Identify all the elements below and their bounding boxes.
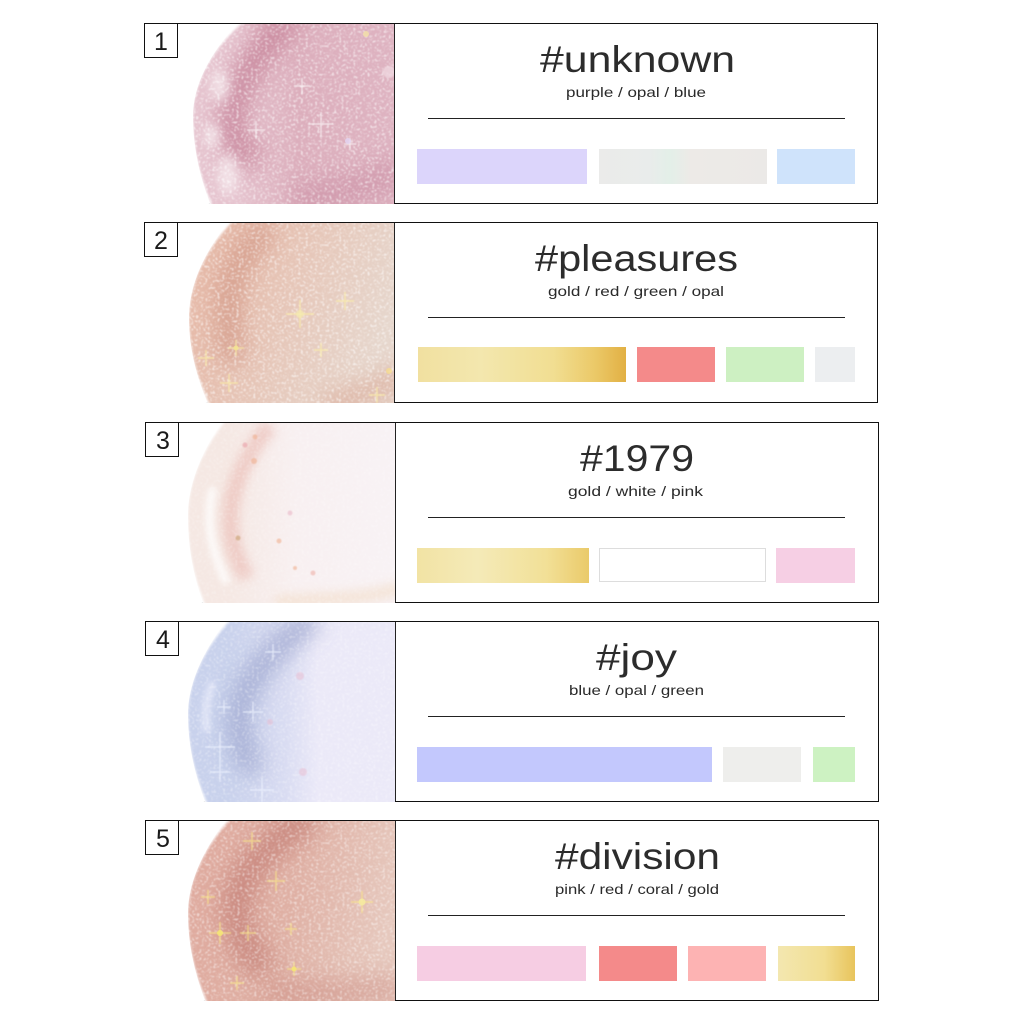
panel 2: #pleasures [144,222,878,403]
number badge 2: 2 [154,227,168,255]
panel 3: #1979 [145,422,879,603]
colour list: purple / opal / blue [566,84,706,100]
number badge 3 [146,422,178,456]
heading: #unknown [540,39,735,80]
panel 1: #unknown [144,23,878,204]
swatch image: coral glitter [145,821,395,1001]
colour bar [418,347,855,382]
heading: #pleasures [535,238,738,279]
panel frame [144,24,878,204]
vertical divider [394,24,396,203]
swatch image: gold glitter [144,223,394,403]
number badge 3: 3 [156,427,170,455]
panel frame [146,622,878,802]
number badge 5: 5 [156,825,170,853]
vertical divider [394,223,396,402]
heading: #joy [596,637,678,678]
number badge 2 [144,222,178,256]
colour bar [417,548,855,583]
panel frame [146,820,878,1000]
colour list: pink / red / coral / gold [555,881,719,897]
number badge 4 [146,622,178,656]
colour list: gold / red / green / opal [548,283,724,299]
vertical divider [394,622,396,801]
colour list: blue / opal / green [569,682,704,698]
heading: #division [555,836,720,877]
panel frame [144,222,878,402]
colour list: gold / white / pink [568,483,704,499]
panel 4: #joy [145,621,879,802]
vertical divider [394,423,396,602]
swatch image: pale pearl glitter [145,423,395,603]
number badge 4: 4 [156,626,170,654]
panel 5: #division [145,820,879,1001]
colour bar [417,747,855,782]
vertical divider [394,821,396,1000]
number badge 1 [144,24,178,58]
colour bar [417,149,855,184]
number badge 5 [146,820,178,854]
number badge 1: 1 [154,28,168,56]
swatch image: blue glitter [145,622,395,802]
heading: #1979 [580,438,694,479]
colour bar [417,946,855,981]
panel frame [146,422,878,602]
swatch image: pink glitter [144,24,394,204]
